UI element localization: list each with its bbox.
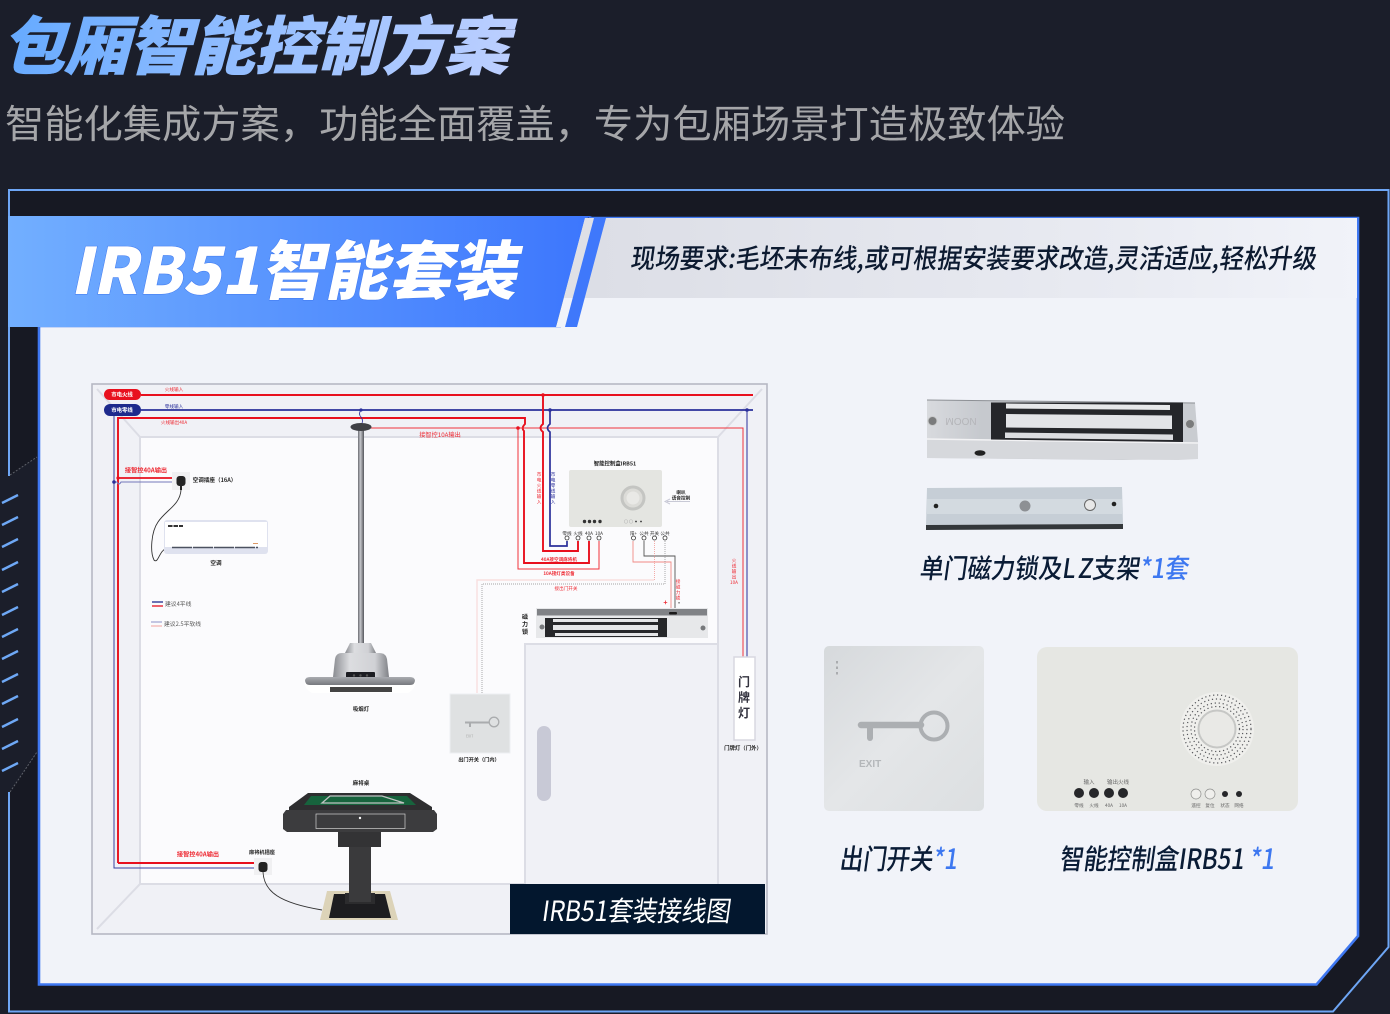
control box IRB51 small: 语音控制 bbox=[672, 494, 691, 502]
vertical wire labels: 输 bbox=[537, 493, 542, 500]
magnetic lock small bbox=[522, 608, 708, 638]
vertical wire labels: 力 bbox=[676, 589, 681, 596]
vertical wire labels: 接 bbox=[676, 578, 681, 585]
door sign light: 灯 bbox=[738, 704, 750, 721]
ports: 40A bbox=[1105, 803, 1113, 809]
vertical wire labels: 电 bbox=[551, 476, 556, 484]
ports: 状态 bbox=[1220, 802, 1230, 809]
ports: 遥控 bbox=[1191, 802, 1201, 809]
exit switch small bbox=[450, 694, 510, 764]
ports: 网络 bbox=[1234, 802, 1244, 809]
terminals bbox=[562, 530, 670, 540]
door sign light: 门 bbox=[738, 673, 750, 690]
magnetic lock small: 力 bbox=[522, 620, 528, 628]
wire labels: 40A接空调麻将机 bbox=[541, 556, 577, 563]
exit switch small: EXIT bbox=[466, 734, 473, 740]
vertical wire labels: 线 bbox=[551, 488, 556, 494]
mahjong table bbox=[283, 779, 437, 920]
exit mark: EXIT bbox=[859, 759, 881, 770]
ports: 10A bbox=[1119, 803, 1127, 809]
door sign light: 门牌灯（门外） bbox=[724, 744, 762, 752]
lock body bbox=[927, 400, 1198, 460]
light sliver bbox=[556, 218, 594, 327]
decorative ticks bbox=[2, 495, 18, 771]
mains live pill bbox=[104, 389, 141, 400]
ports: 输出火线 bbox=[1107, 778, 1129, 786]
terminals: 火线 bbox=[573, 530, 583, 537]
vertical wire labels: 零 bbox=[551, 483, 556, 489]
wire labels: 火线输出40A bbox=[161, 419, 187, 426]
vertical wire labels: 入 bbox=[537, 500, 542, 506]
wire labels: 零线输入 bbox=[165, 403, 184, 410]
product: magnetic lock bbox=[918, 400, 1198, 586]
switch plate bbox=[824, 646, 984, 811]
vertical wire labels: 出 bbox=[732, 574, 737, 580]
subtitle: 智能化集成方案，功能全面覆盖，专为包厢场景打造极致体验 bbox=[5, 94, 1065, 150]
mahjong table: 麻将桌 bbox=[353, 779, 370, 787]
terminals: 开关 bbox=[650, 530, 659, 537]
vertical wire labels: 市 bbox=[551, 471, 556, 478]
door sign light bbox=[724, 657, 762, 752]
blue title tab bbox=[8, 216, 592, 327]
vertical wire labels: 输 bbox=[732, 568, 737, 575]
vertical wire labels bbox=[537, 471, 738, 602]
vertical wire labels: 锁 bbox=[676, 594, 681, 602]
exit switch small: 出门开关（门内） bbox=[458, 756, 500, 764]
main panel bbox=[39, 218, 1358, 984]
wire labels: + bbox=[663, 598, 668, 608]
terminals: 零线 bbox=[562, 530, 572, 537]
air conditioner: 空调 bbox=[210, 559, 222, 567]
wire labels: 接智控40A输出 bbox=[125, 466, 167, 474]
icon: key bbox=[837, 661, 948, 740]
grey requirement band bbox=[584, 218, 1357, 298]
terminals: 公共 bbox=[639, 530, 649, 537]
wire labels: 接智控10A输出 bbox=[419, 430, 461, 439]
terminals: 阳+ bbox=[630, 530, 638, 537]
wire labels: 火线输入 bbox=[165, 386, 184, 393]
vertical wire labels: 输 bbox=[551, 493, 556, 500]
vertical wire labels: 10A bbox=[730, 580, 738, 586]
product: exit switch bbox=[824, 646, 984, 878]
wire labels: 接智控40A输出 bbox=[177, 850, 219, 858]
bracket bbox=[926, 487, 1123, 530]
legend bbox=[151, 599, 201, 628]
vertical wire labels: 火 bbox=[732, 558, 737, 564]
vertical wire labels: 市 bbox=[537, 471, 542, 478]
ceiling hood light: 吸烟灯 bbox=[353, 705, 370, 713]
terminals: 公共 bbox=[660, 530, 670, 537]
wire labels bbox=[125, 386, 681, 858]
vertical wire labels: 火 bbox=[537, 483, 542, 489]
mains live pill: 市电火线 bbox=[111, 390, 133, 398]
air conditioner bbox=[152, 490, 268, 567]
ports bbox=[1074, 778, 1244, 809]
ceiling hood light bbox=[305, 423, 415, 713]
site requirement text: 现场要求:毛坯未布线,或可根据安装要求改造,灵活适应,轻松升级 bbox=[629, 237, 1320, 276]
mahjong socket bbox=[249, 848, 322, 910]
room bbox=[92, 384, 767, 934]
AC socket: 空调插座（16A） bbox=[193, 476, 236, 484]
product: control box bbox=[1037, 647, 1298, 878]
vertical wire labels: 电 bbox=[537, 476, 542, 484]
lock body: NOOM bbox=[945, 415, 977, 426]
legend: 建议2.5平软线 bbox=[164, 619, 201, 628]
mains neutral pill bbox=[104, 404, 141, 416]
control box IRB51 small: 智能控制盒IRB51 bbox=[594, 460, 636, 468]
speaker bbox=[1180, 692, 1254, 766]
wire labels: 10A接灯类设备 bbox=[543, 570, 575, 577]
vertical wire labels: 磁 bbox=[676, 584, 681, 590]
terminals: 40A bbox=[585, 531, 593, 537]
mains neutral pill: 市电零线 bbox=[111, 406, 133, 414]
tab heading: IRB51智能套装 bbox=[66, 220, 532, 313]
box body bbox=[1037, 647, 1298, 811]
mahjong socket: 麻将机插座 bbox=[249, 848, 275, 856]
wire labels: 接出门开关 bbox=[555, 585, 578, 592]
wire labels: - bbox=[678, 598, 681, 608]
magnetic lock small: 锁 bbox=[522, 627, 528, 636]
main wires bbox=[112, 393, 753, 868]
door bbox=[525, 644, 718, 884]
vertical wire labels: 入 bbox=[551, 500, 556, 506]
AC socket bbox=[172, 472, 236, 490]
ports: 输入 bbox=[1083, 778, 1095, 786]
lock caption: 单门磁力锁及LZ支架*1套 bbox=[918, 547, 1192, 586]
diagram caption: IRB51套装接线图 bbox=[540, 889, 734, 930]
ports: 火线 bbox=[1089, 802, 1099, 809]
vertical wire labels: 线 bbox=[537, 488, 542, 494]
switch caption: 出门开关*1 bbox=[838, 837, 961, 878]
terminals: 10A bbox=[595, 531, 603, 537]
ports: 零线 bbox=[1074, 802, 1084, 809]
magnetic lock small: 磁 bbox=[522, 612, 528, 621]
door sign light: 牌 bbox=[738, 688, 750, 706]
wiring diagram bbox=[92, 384, 767, 934]
header banner bbox=[8, 216, 1357, 327]
ports: 复位 bbox=[1205, 802, 1215, 809]
vertical wire labels: 线 bbox=[732, 562, 737, 570]
control box IRB51 small bbox=[569, 460, 691, 527]
control box IRB51 small: 喇叭 bbox=[676, 489, 686, 496]
legend: 建议4平线 bbox=[165, 599, 192, 608]
blue slash bbox=[565, 218, 606, 327]
box caption: 智能控制盒IRB51 *1 bbox=[1058, 837, 1278, 878]
